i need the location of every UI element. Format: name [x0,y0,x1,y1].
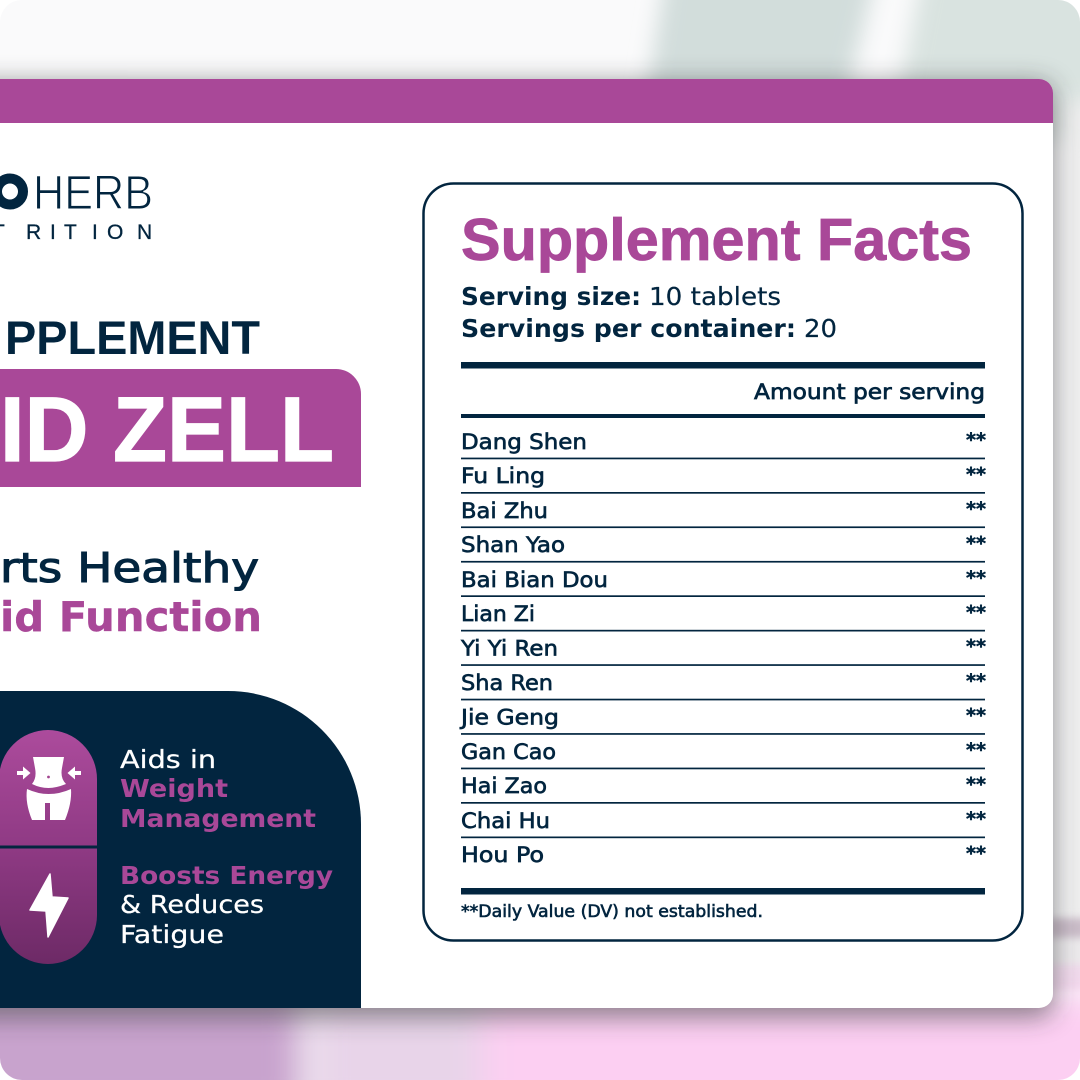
benefit: energy [120,861,333,949]
ingredient table: ** [966,739,986,761]
icon: waist [17,757,81,820]
brand logo: HERB [33,167,153,220]
ingredient table: Bai Zhu [461,499,548,523]
benefit: weight management [120,745,316,833]
card header band [0,79,1053,123]
benefit: weight management: Management [120,804,316,833]
ingredient table: ** [966,705,986,727]
ingredient table: ** [966,774,986,796]
ingredient table: ** [966,429,986,451]
icon capsule [0,730,97,964]
tagline: rts Healthy [0,544,259,592]
tagline [3,550,259,632]
ingredient table: Jie Geng [459,706,559,730]
product type heading: PPLEMENT [5,311,260,364]
product name banner: ID ZELL [0,379,334,481]
ingredient table: Hou Po [461,843,544,867]
serving info [461,282,837,343]
ingredient table: Yi Yi Ren [460,636,558,660]
ingredient table: ** [966,498,986,520]
ingredient table: Shan Yao [461,533,565,557]
ingredient table: Bai Bian Dou [461,568,608,592]
serving info: 20 [804,314,837,343]
supplement facts title: Supplement Facts [461,207,972,273]
benefit: energy: & Reduces [120,890,264,919]
ingredient table: ** [966,808,986,830]
ingredient table: ** [966,636,986,658]
benefit: weight management: Aids in [120,745,216,774]
logo O mark [0,178,23,204]
panel: supplement facts [424,184,1022,940]
serving info: Serving size: [461,282,641,311]
ingredient table: ** [966,670,986,692]
footnote: **Daily Value (DV) not established. [461,902,763,921]
benefit: energy: Fatigue [120,920,224,949]
ingredient table: Dang Shen [461,430,587,454]
ingredient table: Sha Ren [461,671,553,695]
ingredient table: ** [966,464,986,486]
tagline: id Function [0,593,262,641]
ingredient table: ** [966,601,986,623]
ingredient table: Fu Ling [461,464,545,488]
ingredient table [459,429,986,867]
ingredient table: Gan Cao [461,740,556,764]
ingredient table: ** [966,842,986,864]
ingredient table: Lian Zi [461,602,535,626]
benefit: weight management: Weight [120,774,228,803]
ingredient table: Chai Hu [461,809,550,833]
ingredient table: ** [966,567,986,589]
amount per serving header: Amount per serving [754,380,985,404]
benefit: energy: Boosts Energy [120,861,333,890]
serving info: Servings per container: [461,314,796,343]
ingredient table: ** [966,532,986,554]
benefits panel [0,691,361,1008]
icon: lightning bolt [30,874,68,937]
ingredient table: Hai Zao [461,774,547,798]
brand logo [0,174,151,240]
serving info: 10 tablets [649,282,781,311]
